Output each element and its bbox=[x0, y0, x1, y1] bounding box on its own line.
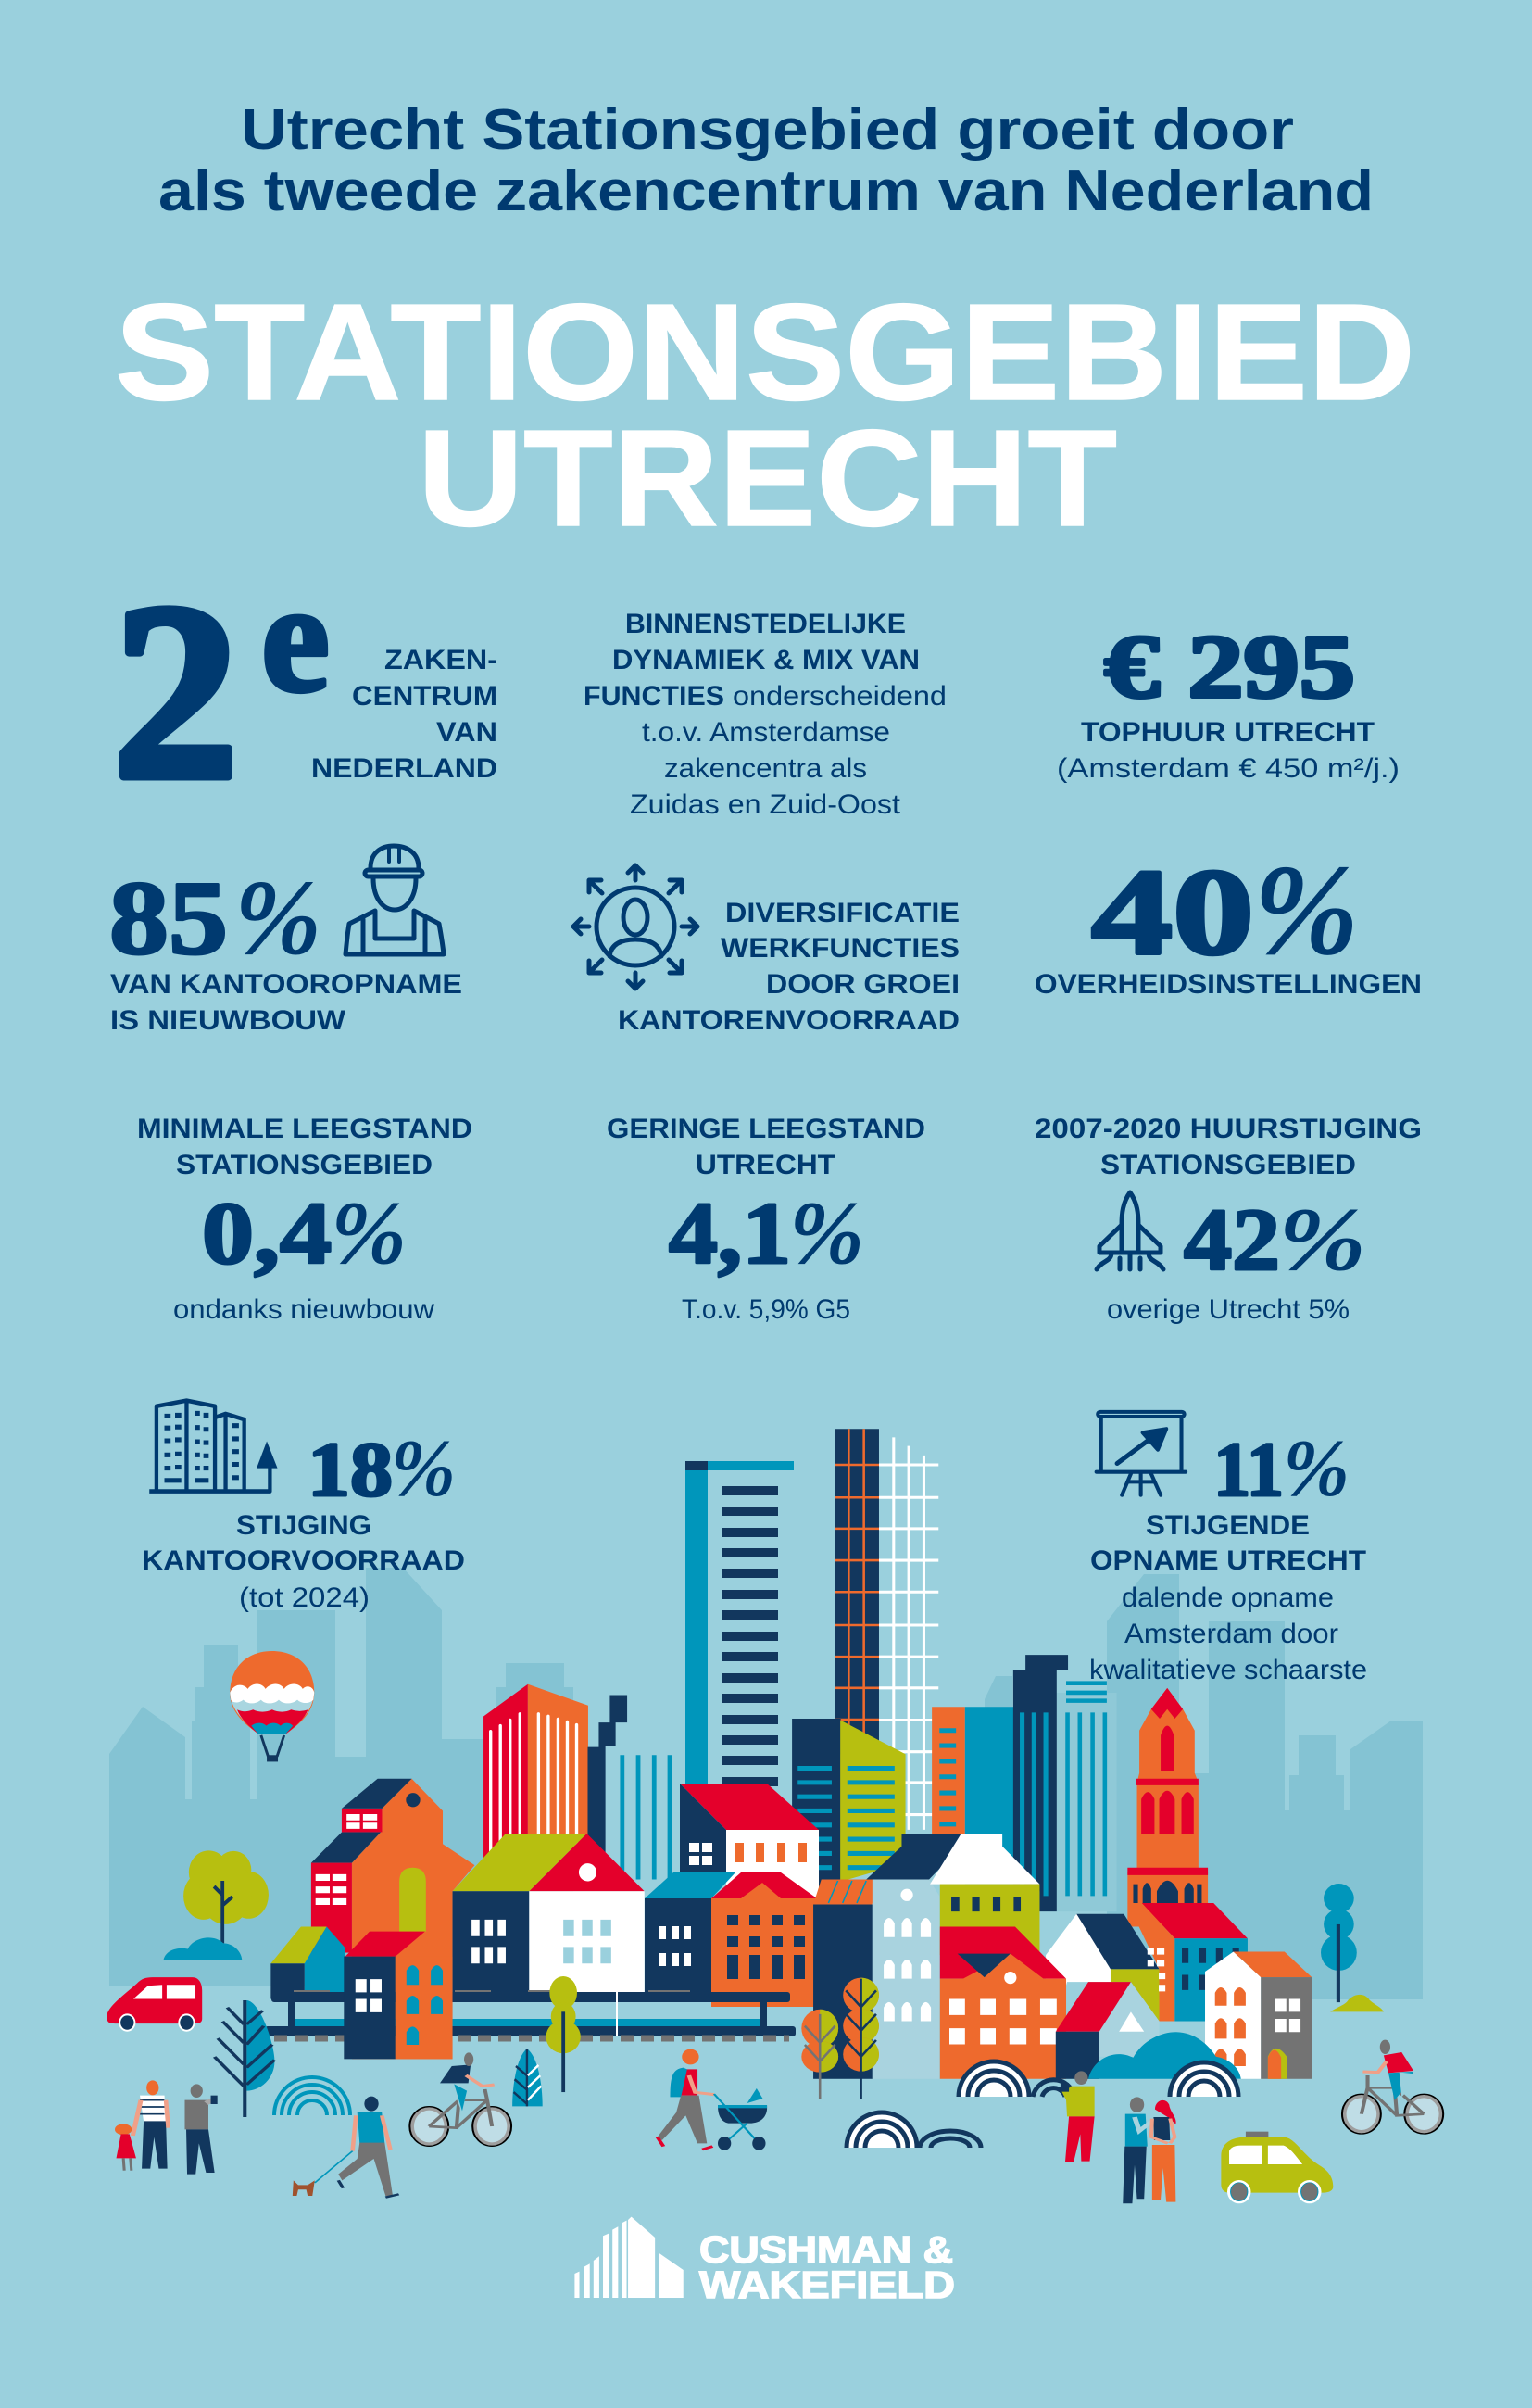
stat: 40% overheidsinstellingen: % bbox=[1253, 838, 1359, 982]
text block: diversificatie werkfuncties: WERKFUNCTIES bbox=[721, 933, 960, 964]
logo text: CUSHMAN & bbox=[699, 2228, 953, 2271]
stat: 18% stijging kantoorvoorraad: (tot 2024) bbox=[239, 1582, 370, 1613]
stat: huurstijging: 42 bbox=[1184, 1191, 1280, 1289]
stat: 85% nieuwbouw: VAN KANTOOROPNAME bbox=[110, 969, 462, 1000]
stat: huurstijging bbox=[1035, 1114, 1422, 1325]
stat: 11% stijgende opname: dalende opname bbox=[1122, 1582, 1334, 1613]
stat: 40% overheidsinstellingen: 40 bbox=[1091, 843, 1254, 980]
icon: construction worker bbox=[345, 846, 444, 954]
navy and lime block bbox=[792, 1719, 906, 1891]
stat: huurstijging: overige Utrecht 5% bbox=[1107, 1294, 1350, 1325]
navy stepped tower bbox=[587, 1695, 627, 1859]
stat: 18% stijging kantoorvoorraad bbox=[142, 1424, 465, 1613]
blue bush bbox=[1088, 2032, 1241, 2079]
pale blue arched house bbox=[873, 1879, 939, 2079]
stat: 11% stijgende opname: 11 bbox=[1213, 1427, 1284, 1513]
hot air balloon bbox=[230, 1651, 314, 1761]
teal rainbow bush bbox=[274, 2077, 350, 2115]
man with striped shirt bbox=[132, 2080, 169, 2169]
white gabled house with navy roof bbox=[1046, 1914, 1160, 2022]
stat: 11% stijgende opname bbox=[1089, 1424, 1367, 1685]
people left bbox=[115, 2049, 767, 2198]
stat: 40% overheidsinstellingen: OVERHEIDSINSTELLINGEN bbox=[1035, 969, 1422, 1000]
first row of houses bbox=[645, 1784, 819, 2007]
text block: diversificatie werkfuncties: KANTORENVOORRAAD bbox=[618, 1005, 960, 1036]
stat: tophuur: TOPHUUR UTRECHT bbox=[1081, 717, 1375, 748]
white building with red roof bbox=[680, 1784, 819, 1913]
subtitle heading: Utrecht Stationsgebied groeit door bbox=[241, 98, 1294, 162]
stat: 2e zakencentrum: e bbox=[261, 550, 330, 725]
stat: geringe leegstand bbox=[607, 1114, 925, 1325]
title bbox=[115, 276, 1415, 555]
stat: minimale leegstand: MINIMALE LEEGSTAND bbox=[137, 1114, 472, 1144]
stat: tophuur bbox=[1057, 617, 1400, 784]
blue and orange house behind bbox=[1136, 1903, 1248, 2022]
navy stepped tower right bbox=[1013, 1655, 1068, 1911]
text block: binnenstedelijke dynamiek: t.o.v. Amsterdamse bbox=[642, 717, 890, 748]
right cluster houses bbox=[801, 1834, 1384, 2099]
autumn tree small bbox=[801, 2010, 838, 2099]
text block: binnenstedelijke dynamiek: DYNAMIEK & MIX VAN bbox=[612, 645, 920, 675]
navy block with striped roof bbox=[813, 1879, 883, 2079]
tall orange warehouse bbox=[311, 1779, 474, 2059]
stat: 18% stijging kantoorvoorraad: KANTOORVOORRAAD bbox=[142, 1545, 465, 1576]
lime tree with bush bbox=[164, 1850, 269, 1960]
text block: binnenstedelijke dynamiek: onderscheidend bbox=[733, 681, 947, 712]
text block: binnenstedelijke dynamiek: Zuidas en Zuid-Oost bbox=[630, 789, 901, 820]
stat: 11% stijgende opname: OPNAME UTRECHT bbox=[1090, 1545, 1366, 1576]
woman with stroller bbox=[658, 2049, 767, 2150]
text block: binnenstedelijke dynamiek bbox=[584, 609, 947, 820]
stat: 2e zakencentrum: CENTRUM bbox=[352, 681, 497, 712]
orange house with red roof bbox=[940, 1926, 1066, 2079]
walker with dog bbox=[293, 2097, 399, 2198]
left cluster houses bbox=[270, 1779, 645, 2059]
logo text: WAKEFIELD bbox=[699, 2263, 955, 2306]
logo mark bbox=[574, 2217, 684, 2298]
cyclist left bbox=[409, 2052, 511, 2146]
navy rainbow bushes bbox=[845, 2060, 1240, 2148]
light striped tower bbox=[1057, 1683, 1117, 1911]
front navy and orange house bbox=[344, 1932, 453, 2059]
stat: 85% nieuwbouw: 85 bbox=[109, 861, 228, 977]
train bbox=[265, 1991, 796, 2038]
stat: 2e zakencentrum: 2 bbox=[113, 552, 239, 831]
lime lollipop tree bbox=[546, 1976, 581, 2092]
stat: minimale leegstand: ondanks nieuwbouw bbox=[173, 1294, 434, 1325]
stat: minimale leegstand bbox=[137, 1114, 472, 1325]
subtitle heading bbox=[158, 98, 1374, 223]
text block: binnenstedelijke dynamiek: BINNENSTEDELIJKE bbox=[625, 609, 906, 639]
lime building with white roof bbox=[866, 1834, 1039, 1955]
stat: huurstijging: 2007-2020 HUURSTIJGING bbox=[1035, 1114, 1422, 1144]
orange gabled house bbox=[711, 1872, 817, 2007]
stat: 85% nieuwbouw: % bbox=[234, 859, 321, 977]
stat: tophuur: € 295 bbox=[1104, 617, 1355, 717]
red car bbox=[107, 1977, 202, 2032]
girl in red dress bbox=[115, 2124, 136, 2171]
stat: 18% stijging kantoorvoorraad: 18 bbox=[308, 1427, 393, 1513]
stat: 11% stijgende opname: STIJGENDE bbox=[1146, 1510, 1310, 1541]
title: UTRECHT bbox=[418, 402, 1117, 555]
stat: 2e zakencentrum: VAN bbox=[436, 717, 497, 748]
man with camera bbox=[1061, 2071, 1095, 2162]
icon: presentation board with rising arrow bbox=[1097, 1412, 1186, 1495]
foreground trees and car bbox=[107, 1850, 581, 2106]
stat: geringe leegstand: 4,1 bbox=[669, 1184, 791, 1282]
stat: 11% stijgende opname: Amsterdam door bbox=[1124, 1619, 1338, 1649]
cyclist right bbox=[1342, 2040, 1443, 2134]
blue tree right bbox=[1321, 1884, 1384, 2011]
stat: 2e zakencentrum: NEDERLAND bbox=[311, 753, 497, 784]
striped tower bbox=[622, 1755, 670, 1879]
stat: huurstijging: % bbox=[1278, 1190, 1366, 1290]
white grid tower bbox=[879, 1437, 938, 1830]
stat: 18% stijging kantoorvoorraad: STIJGING bbox=[236, 1510, 371, 1541]
stat: minimale leegstand: 0,4 bbox=[202, 1184, 332, 1282]
Dom tower bbox=[1127, 1688, 1208, 1926]
navy house with blue roof bbox=[645, 1872, 735, 1996]
logo text bbox=[699, 2228, 955, 2306]
subtitle heading: als tweede zakencentrum van Nederland bbox=[158, 159, 1374, 223]
icon: diversification person with arrows bbox=[573, 865, 697, 989]
stat: 40% overheidsinstellingen bbox=[1035, 838, 1422, 1000]
stat: 11% stijgende opname: kwalitatieve schaarste bbox=[1089, 1655, 1367, 1685]
icon: rocket bbox=[1097, 1192, 1163, 1269]
autumn tree tall bbox=[843, 1978, 879, 2099]
stat: 2e zakencentrum: ZAKEN- bbox=[384, 645, 497, 675]
stat: geringe leegstand: % bbox=[789, 1183, 864, 1283]
stat: 85% nieuwbouw: IS NIEUWBOUW bbox=[110, 1005, 346, 1036]
lime taxi bbox=[1221, 2132, 1333, 2203]
lime and red gabled house bbox=[453, 1834, 645, 1995]
couple bbox=[1123, 2097, 1176, 2203]
stat: geringe leegstand: T.o.v. 5,9% G5 bbox=[682, 1294, 850, 1325]
navy tower with orange grid bbox=[835, 1429, 879, 1741]
title: STATIONSGEBIED bbox=[115, 276, 1415, 429]
stat: 85% nieuwbouw bbox=[109, 859, 462, 1036]
blue half tree bbox=[215, 2000, 274, 2117]
stat: minimale leegstand: % bbox=[331, 1183, 407, 1283]
stat: huurstijging: STATIONSGEBIED bbox=[1100, 1150, 1356, 1180]
stat: 11% stijgende opname: % bbox=[1283, 1424, 1350, 1514]
stat: geringe leegstand: GERINGE LEEGSTAND bbox=[607, 1114, 925, 1144]
red and orange tower bbox=[483, 1684, 588, 1859]
small blue leaf tree bbox=[512, 2049, 543, 2106]
white and grey house bbox=[1205, 1952, 1312, 2079]
stat: tophuur: (Amsterdam € 450 m²/j.) bbox=[1057, 753, 1400, 784]
skyline background bbox=[109, 1568, 1423, 1999]
red roof navy cottage bbox=[1056, 1982, 1160, 2079]
text block: diversificatie werkfuncties: DIVERSIFICATIE bbox=[725, 898, 960, 928]
background skyscrapers right bbox=[792, 1429, 1208, 1926]
stat: 2e zakencentrum bbox=[113, 550, 497, 831]
stat: geringe leegstand: UTRECHT bbox=[696, 1150, 835, 1180]
orange narrow and blue block bbox=[932, 1707, 1015, 1896]
text block: diversificatie werkfuncties bbox=[618, 898, 960, 1036]
icon: office buildings with rising arrow bbox=[149, 1401, 278, 1492]
people right bbox=[1061, 2040, 1443, 2203]
man with phone bbox=[184, 2084, 218, 2175]
small lime and blue house bbox=[270, 1926, 345, 1999]
stat: 18% stijging kantoorvoorraad: % bbox=[391, 1424, 456, 1514]
background skyscrapers left bbox=[483, 1684, 670, 1879]
tall blue tower with navy floors bbox=[685, 1461, 794, 1795]
stat: minimale leegstand: STATIONSGEBIED bbox=[176, 1150, 433, 1180]
text block: binnenstedelijke dynamiek: FUNCTIES bbox=[584, 681, 724, 712]
text block: diversificatie werkfuncties: DOOR GROEI bbox=[766, 969, 960, 1000]
text block: binnenstedelijke dynamiek: zakencentra als bbox=[664, 753, 867, 784]
